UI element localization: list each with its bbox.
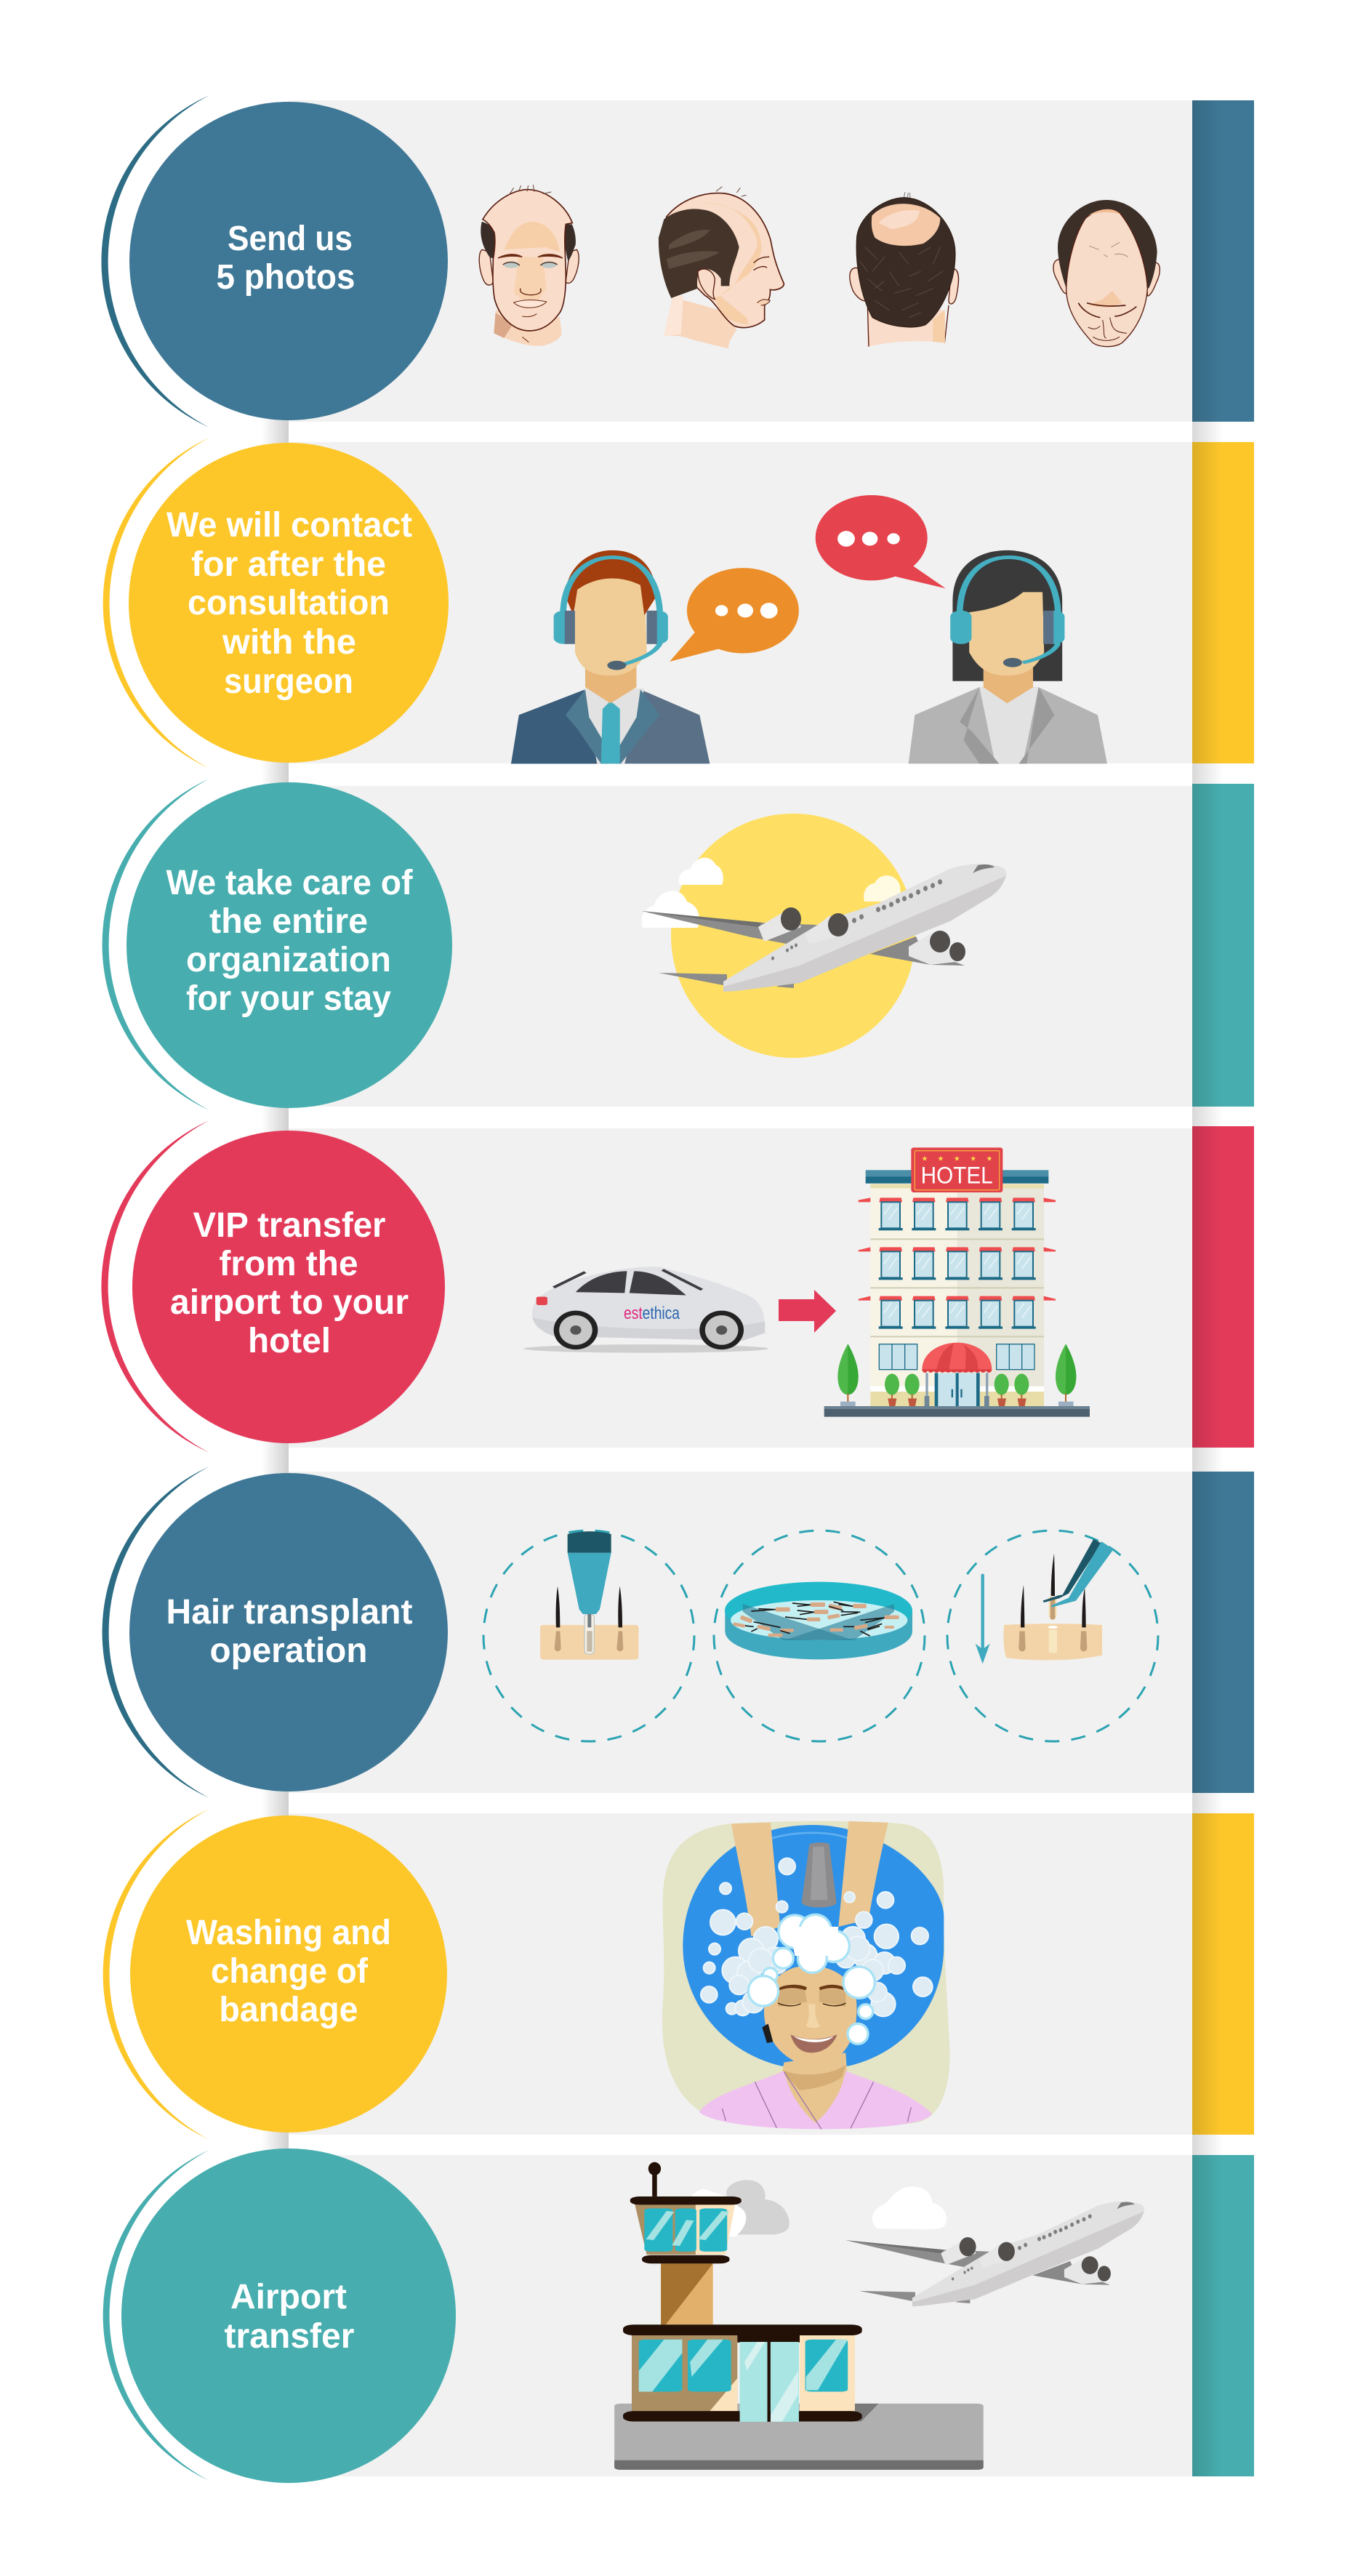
panel background 7 — [289, 2155, 1192, 2476]
panel: step 7 airport transfer — [103, 2148, 1254, 2483]
illustration: car — [523, 1267, 768, 1353]
panel background 5 — [289, 1472, 1192, 1793]
circle 1 — [129, 102, 448, 420]
panel: step 6 washing — [103, 1809, 1254, 2140]
colour strip 7 — [1192, 2155, 1254, 2476]
panel: step 2 consultation contact — [103, 438, 1254, 769]
panel background 4 — [289, 1128, 1192, 1448]
arrow — [779, 1290, 836, 1333]
heading: we take care: We take care of — [166, 864, 413, 902]
panel background 1 — [289, 100, 1192, 422]
illustration: hotel: ★ — [970, 1155, 976, 1163]
illustration: male agent with orange speech bubble — [511, 550, 799, 763]
illustration: airplane — [642, 864, 1006, 992]
illustration: head back — [850, 192, 959, 347]
illustration: head front — [479, 185, 579, 346]
colour strip 2 — [1192, 442, 1254, 763]
heading: we take care: the entire — [209, 902, 368, 941]
heading: hair transplant: Hair transplant — [166, 1593, 413, 1632]
heading: send us 5 photos — [217, 220, 355, 297]
illustration: control tower and terminal — [614, 2162, 984, 2470]
colour strip 1 — [1192, 100, 1254, 422]
heading: hair transplant — [166, 1593, 413, 1670]
dashed circle one with extraction tool — [483, 1530, 694, 1741]
panel background 3 — [289, 786, 1192, 1107]
colour strip 4 — [1192, 1126, 1254, 1448]
illustration: airplane departing — [845, 2202, 1144, 2306]
heading: we will contact: We will contact — [166, 506, 412, 545]
heading: airport transfer — [224, 2278, 355, 2356]
illustration: car: estethica — [624, 1304, 680, 1323]
circle 2 — [129, 443, 449, 763]
heading: we will contact: consultation — [188, 584, 390, 622]
heading: VIP transfer: from the — [220, 1245, 358, 1283]
heading: VIP transfer: VIP transfer — [193, 1206, 385, 1245]
panel: step 3 organization — [103, 779, 1254, 1110]
heading: we will contact: for after the — [191, 545, 386, 584]
illustration: hair wash — [662, 1821, 950, 2129]
heading: VIP transfer — [170, 1206, 409, 1360]
illustration: hotel: ★ — [922, 1155, 928, 1163]
illustration: head side — [659, 187, 784, 348]
panel: step 4 VIP transfer — [101, 1120, 1254, 1453]
illustration: clouds — [642, 858, 901, 928]
panel: step 1 send photos — [101, 95, 1254, 428]
circle 6 — [130, 1815, 447, 2132]
illustration: head top — [1053, 200, 1160, 347]
crescent 1 — [101, 95, 209, 428]
circle 5 — [129, 1473, 448, 1791]
heading: we will contact: surgeon — [224, 662, 353, 701]
illustration: hotel — [824, 1147, 1090, 1417]
illustration: cloud right — [872, 2186, 947, 2229]
colour strip 6 — [1192, 1813, 1254, 2135]
heading: VIP transfer: airport to your — [170, 1283, 409, 1322]
illustration: hotel: ★ — [987, 1155, 992, 1163]
heading: airport transfer: transfer — [224, 2317, 355, 2356]
illustration: female agent with red speech bubble — [816, 495, 1107, 763]
dashed circle two with petri dish — [714, 1530, 925, 1741]
heading: washing — [186, 1914, 391, 2029]
heading: send us 5 photos: 5 photos — [217, 258, 355, 297]
crescent 5 — [103, 1466, 209, 1798]
colour strip 3 — [1192, 784, 1254, 1107]
heading: we will contact — [166, 506, 412, 701]
crescent 2 — [103, 438, 209, 769]
illustration: hotel: HOTEL — [921, 1161, 993, 1188]
heading: washing: bandage — [220, 1991, 358, 2029]
dashed circle three with forceps — [947, 1530, 1158, 1741]
crescent 7 — [103, 2150, 209, 2481]
panel: step 5 hair transplant operation — [103, 1466, 1254, 1798]
heading: airport transfer: Airport — [230, 2278, 347, 2316]
illustration: hotel: ★ — [954, 1155, 960, 1163]
illustration: yellow sun — [671, 814, 915, 1058]
circle 7 — [121, 2148, 456, 2483]
heading: send us 5 photos: Send us — [228, 220, 353, 258]
colour strip 5 — [1192, 1472, 1254, 1793]
crescent 4 — [101, 1120, 209, 1453]
panel background 6 — [289, 1813, 1192, 2135]
crescent 3 — [103, 779, 209, 1110]
crescent 6 — [103, 1809, 209, 2140]
heading: we take care — [166, 864, 413, 1018]
heading: washing: Washing and — [186, 1914, 391, 1952]
heading: VIP transfer: hotel — [248, 1322, 331, 1360]
heading: we will contact: with the — [222, 623, 356, 662]
circle 3 — [126, 782, 452, 1108]
heading: we take care: organization — [186, 941, 391, 979]
heading: hair transplant: operation — [209, 1632, 368, 1670]
heading: we take care: for your stay — [186, 979, 391, 1018]
panel background 2 — [289, 442, 1192, 763]
circle 4 — [132, 1131, 445, 1443]
heading: washing: change of — [211, 1952, 369, 1991]
illustration: hotel: ★ — [938, 1155, 944, 1163]
